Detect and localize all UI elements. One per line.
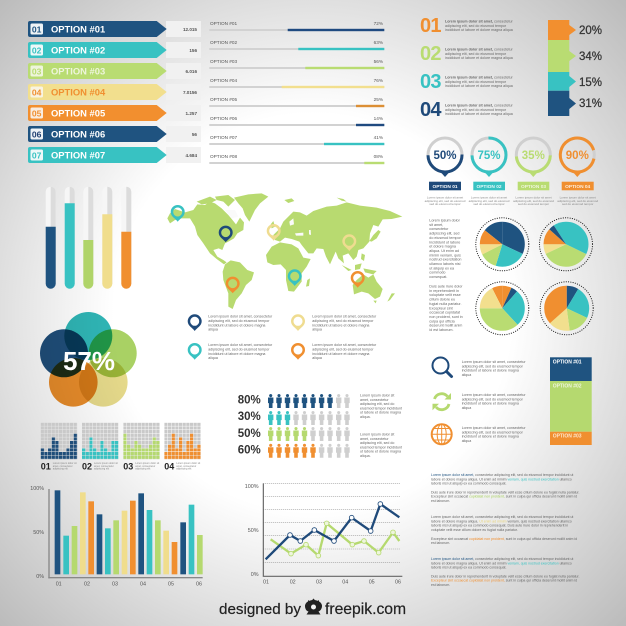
map legend: Lorem ipsum dolor sit amet, consectetur <box>312 314 377 318</box>
panel: ring gauges <box>425 134 598 206</box>
panel: numbered list: 03 <box>420 71 441 93</box>
text block: beside pie charts: id est laborum. <box>429 328 453 332</box>
text block: paragraphs: est laborum. <box>431 499 450 503</box>
people pictogram chart: 30% <box>238 411 261 423</box>
text block: beside pie charts: ullamco laboris nisi <box>429 262 461 266</box>
pie chart 3 <box>476 282 529 335</box>
ribbon: option 02 <box>28 42 197 58</box>
footer: designed by freepik: designed by <box>219 601 301 618</box>
bar chart: 100% <box>30 486 44 492</box>
waffle chart 03: Lorem ipsum dolor sit <box>135 462 160 465</box>
text block: beside pie charts <box>429 218 463 332</box>
map legend: Lorem ipsum dolor sit amet, consectetur <box>208 314 273 318</box>
text block: paragraphs: cupidatat non proident, sunt in culpa qui officia deserunt mollit anim id <box>469 537 577 541</box>
panel: numbered list: 02 <box>420 43 441 65</box>
text block: beside pie charts: in reprehenderit in <box>429 289 459 293</box>
bar chart: 05 <box>168 582 174 588</box>
bar chart: 02 <box>84 582 90 588</box>
text block: paragraphs: sunt in culpa qui officia deserunt mollit anim id <box>506 579 577 583</box>
bar chart <box>30 486 203 588</box>
gauge: 75%: Lorem ipsum dolor sit amet <box>471 196 507 200</box>
text block: paragraphs: Duis aute irure dolor in reprehenderit in voluptate velit esse cillum dolore eu fugiat nulla pariatur. <box>431 490 579 494</box>
panel: progress bars: 25% <box>374 97 383 102</box>
gauge: 90%: Lorem ipsum dolor sit amet <box>560 196 596 200</box>
panel: progress bars: OPTION #01 <box>210 21 237 26</box>
waffle chart 02: amet, consectetur <box>94 465 114 468</box>
text: refresh description: Lorem ipsum dolor sit amet, consectetur <box>462 393 526 397</box>
ribbon: option 02: OPTION #02 <box>51 45 105 56</box>
text: refresh description: aliqua <box>462 406 471 410</box>
stacked option column: OPTION #03 <box>553 434 582 440</box>
gauge: 35%: sed do eiusmod tempor <box>518 202 549 206</box>
pie chart 4 <box>540 282 593 335</box>
text block: paragraphs <box>431 473 579 587</box>
stacked percent bar <box>548 20 602 116</box>
waffle chart 01: amet, consectetur <box>53 465 73 468</box>
text block: paragraphs: consectetur adipiscing elit, sed do eiusmod tempor incididunt ut <box>475 557 573 561</box>
waffle chart 03 <box>123 423 160 471</box>
text block: paragraphs: est laborum. <box>431 541 450 545</box>
text block: paragraphs: laboris nisi ut aliquip ex ea commodo consequat. <box>431 566 507 570</box>
text: magnifier description: incididunt ut labore et dolore magna <box>462 369 519 373</box>
icon: magnifier <box>432 358 452 376</box>
text block: beside pie charts: deserunt mollit anim <box>429 324 462 328</box>
text: globe description: aliqua <box>462 439 471 443</box>
waffle chart 02: Lorem ipsum dolor sit <box>94 462 118 465</box>
icon: globe <box>432 424 452 444</box>
ribbon: option 02: 156 <box>189 48 197 53</box>
panel: numbered list: incididunt ut labore et dolore magna aliqua <box>445 28 513 32</box>
text block: beside pictogram: eiusmod tempor incididunt <box>360 445 402 449</box>
waffle chart 03: amet, consectetur <box>135 465 155 468</box>
ribbon: option 01: 01 <box>32 25 42 35</box>
map legend: adipiscing elit, sed do eiusmod tempor <box>312 347 374 351</box>
text block: beside pie charts: occaecat cupidatat <box>429 311 460 315</box>
ribbon: option 06: OPTION #06 <box>51 129 105 140</box>
bar chart: 0% <box>36 574 44 580</box>
panel: progress bars: OPTION #04 <box>210 78 237 83</box>
panel: option ribbons <box>28 21 201 163</box>
gauge: 75%: sed do eiusmod tempor <box>473 202 505 206</box>
line chart: 02 <box>290 580 296 586</box>
panel: numbered list: Lorem ipsum dolor sit amet, <box>445 76 493 80</box>
text block: beside pie charts: adipiscing elit, sed <box>429 232 459 236</box>
icon: freepik logo <box>305 598 322 614</box>
line chart: 50% <box>248 528 259 534</box>
gauge: 35%: 35% <box>522 150 545 162</box>
text block: beside pie charts: minim veniam, quis <box>429 253 461 257</box>
panel: numbered list: consectetur <box>494 76 513 80</box>
ribbon: option 04: 7.0156 <box>183 90 197 95</box>
gauge: 75%: OPTION 02 <box>476 184 502 190</box>
stacked option column <box>550 357 592 445</box>
ribbon: option 01 <box>28 21 197 37</box>
text block: beside pie charts: Lorem ipsum dolor <box>429 218 461 222</box>
panel: numbered list: consectetur <box>494 48 513 52</box>
text block: beside pie charts: et dolore magna <box>429 245 457 249</box>
gauge: 35%: Lorem ipsum dolor sit amet <box>515 196 552 200</box>
line chart: 05 <box>369 580 375 586</box>
text: globe description: adipiscing elit, sed do eiusmod tempor <box>462 430 524 434</box>
map legend: aliqua <box>208 328 218 332</box>
text block: beside pie charts: nostrud exercitation <box>429 258 461 262</box>
icon: refresh arrows <box>432 393 451 410</box>
stacked percent bar: 34% <box>579 51 602 63</box>
ribbon: option 04 <box>28 84 197 100</box>
text block: beside pictogram: adipiscing elit, sed do <box>360 402 394 406</box>
gauge: 90%: OPTION 04 <box>565 184 591 190</box>
ribbon: option 07: OPTION #07 <box>51 150 105 161</box>
ribbon: option 04: 04 <box>32 88 42 98</box>
panel: numbered list: consectetur <box>494 20 513 24</box>
ribbon: option 03: OPTION #03 <box>51 66 105 77</box>
text block: beside pictogram: Lorem ipsum dolor sit <box>360 432 394 436</box>
panel: numbered list: consectetur <box>494 104 513 108</box>
footer: designed by freepik: freepik.com <box>325 601 406 618</box>
gauge: 35% <box>513 137 554 206</box>
gauge: 75%: 75% <box>477 150 501 162</box>
ribbon: option 06 <box>28 126 197 142</box>
waffle chart 02 <box>82 423 119 471</box>
map legend: aliqua <box>312 328 322 332</box>
line chart: 03 <box>316 580 322 586</box>
gauge: 50% <box>425 138 466 206</box>
text block: paragraphs: laboris nisi ut aliquip ex ea commodo consequat. Duis aute irure dolor in reprehenderit in <box>431 524 568 528</box>
ribbon: option 07 <box>28 147 197 163</box>
line chart <box>245 483 402 586</box>
text block: paragraphs: Lorem ipsum dolor sit amet, <box>431 557 474 561</box>
map legend: adipiscing elit, sed do eiusmod tempor <box>312 319 374 323</box>
stacked percent bar: 15% <box>579 77 602 89</box>
text block: beside pie charts: commodo <box>429 271 446 275</box>
text: refresh description: adipiscing elit, sed do eiusmod tempor <box>462 397 524 401</box>
ribbon: option 05 <box>28 105 197 121</box>
map legend: aliqua <box>208 356 218 360</box>
ribbon: option 03: 03 <box>32 67 42 77</box>
panel: numbered list: adipiscing elit, sed do eiusmod tempor <box>445 80 507 84</box>
text: magnifier description: Lorem ipsum dolor sit amet, consectetur <box>462 360 526 364</box>
text block: paragraphs: cupidatat non proident, sunt in culpa qui officia deserunt mollit anim id <box>469 495 577 499</box>
map legend: incididunt ut labore et dolore magna <box>312 352 369 356</box>
text block: paragraphs: Excepteur sint occaecat <box>431 537 469 541</box>
panel: numbered list: adipiscing elit, sed do eiusmod tempor <box>445 52 507 56</box>
gauge: 50%: Lorem ipsum dolor sit amet <box>427 196 463 200</box>
text block: beside pie charts: culpa qui officia <box>429 319 456 323</box>
text block: beside pie charts: voluptate velit esse <box>429 293 461 297</box>
ribbon: option 05: 05 <box>32 109 42 119</box>
panel: progress bars: 41% <box>374 135 383 140</box>
text: globe description: incididunt ut labore et dolore magna <box>462 435 519 439</box>
text block: paragraphs: est laborum. <box>431 583 450 587</box>
text block: beside pie charts: aliqua. Ut enim ad <box>429 249 459 253</box>
line chart: 01 <box>263 580 269 586</box>
text block: beside pie charts: cillum dolore eu <box>429 298 455 302</box>
people pictogram chart: 80% <box>238 395 261 407</box>
text block: beside pictogram: Lorem ipsum dolor sit <box>360 394 394 398</box>
waffle chart 01: 01 <box>41 461 51 471</box>
panel: progress bars: 14% <box>374 116 383 121</box>
text block: paragraphs: laboris nisi ut aliquip ex ea commodo consequat. <box>431 482 507 486</box>
venn diagram 57%: 57% <box>63 346 115 376</box>
panel: numbered list: 01 <box>420 15 441 37</box>
panel: numbered list <box>420 15 514 121</box>
text block: paragraphs: veniam, quis nostrud exercitation ullamco <box>507 561 572 565</box>
text block: beside pie charts: do eiusmod tempor <box>429 236 462 240</box>
ribbon: option 07: 4.684 <box>186 153 197 158</box>
text: refresh description: incididunt ut labore et dolore magna <box>462 402 519 406</box>
ribbon: option 01: OPTION #01 <box>51 24 105 35</box>
text block: paragraphs: labore et dolore magna aliqua. Ut enim ad minim <box>431 561 507 565</box>
people pictogram chart: 50% <box>238 428 261 440</box>
people pictogram chart <box>238 394 350 458</box>
text block: beside pie charts: non proident, sunt in <box>429 315 463 319</box>
panel: progress bars: OPTION #07 <box>210 135 237 140</box>
waffle chart 03: 03 <box>123 461 133 471</box>
panel: progress bars: OPTION #06 <box>210 116 237 121</box>
ribbon: option 01: 12.015 <box>183 27 197 32</box>
ribbon: option 03 <box>28 63 197 79</box>
map legend: adipiscing elit, sed do eiusmod tempor <box>208 347 270 351</box>
panel: numbered list: adipiscing elit, sed do eiusmod tempor <box>445 108 507 112</box>
bar chart: 03 <box>112 582 118 588</box>
text block: paragraphs: consectetur adipiscing elit, sed do eiusmod tempor incididunt ut <box>475 473 573 477</box>
bar chart: 04 <box>140 582 146 588</box>
text block: beside pictogram: aliqua. <box>360 415 371 419</box>
map legend: incididunt ut labore et dolore magna <box>208 352 265 356</box>
gauge: 90%: adipiscing elit, sed do eiusmod <box>557 199 598 203</box>
test tube bars <box>46 187 131 289</box>
text block: beside pie charts: incididunt ut labore <box>429 240 460 244</box>
panel: progress bars: OPTION #03 <box>210 59 237 64</box>
text block: beside pie charts: Excepteur sint <box>429 306 453 310</box>
map legend: Lorem ipsum dolor sit amet, consectetur <box>312 343 377 347</box>
map legend: incididunt ut labore et dolore magna <box>312 323 369 327</box>
text block: paragraphs: Excepteur sint occaecat <box>431 495 469 499</box>
text block: paragraphs: labore et dolore magna aliqua. Ut enim ad minim <box>431 477 507 481</box>
line chart: 06 <box>395 580 401 586</box>
gauge: 35%: adipiscing elit, sed do eiusmod <box>513 199 554 203</box>
text block: beside pictogram: amet, consectetur <box>360 398 389 402</box>
panel: progress bars: OPTION #05 <box>210 97 237 102</box>
text block: paragraphs: labore et dolore magna aliqua. <box>431 519 479 523</box>
text block: paragraphs: voluptate velit esse cillum dolore eu fugiat nulla pariatur. <box>431 528 518 532</box>
panel: progress bars: OPTION #08 <box>210 154 237 159</box>
text block: beside pictogram: ut labore et dolore magna <box>360 450 401 454</box>
panel: numbered list: adipiscing elit, sed do eiusmod tempor <box>445 24 507 28</box>
gauge: 90%: sed do eiusmod tempor <box>562 202 593 206</box>
panel: numbered list: Lorem ipsum dolor sit amet, <box>445 104 493 108</box>
text: globe description: Lorem ipsum dolor sit amet, consectetur <box>462 426 526 430</box>
gauge: 90%: 90% <box>566 150 589 162</box>
venn diagram 57% <box>40 312 137 407</box>
gauge: 90% <box>557 134 598 206</box>
waffle chart 01: Lorem ipsum dolor sit <box>53 462 77 465</box>
waffle chart 04: amet, consectetur <box>176 465 196 468</box>
panel: numbered list: incididunt ut labore et dolore magna aliqua <box>445 112 513 116</box>
text block: paragraphs: Excepteur sint occaecat cupidatat non proident, <box>431 579 505 583</box>
panel: progress bars: 08% <box>374 154 383 159</box>
line chart: 0% <box>251 572 259 578</box>
line chart: 04 <box>342 580 348 586</box>
text block: beside pie charts: sit amet, <box>429 223 443 227</box>
ribbon: option 07: 07 <box>32 151 42 161</box>
map pins <box>171 205 365 293</box>
map legend <box>188 314 377 360</box>
text block: beside pie charts: consectetur <box>429 227 449 231</box>
text block: paragraphs: Ut enim ad minim veniam, quis nostrud exercitation ullamco <box>479 519 572 523</box>
ribbon: option 06: 06 <box>32 130 42 140</box>
text: magnifier description: adipiscing elit, sed do eiusmod tempor <box>462 364 524 368</box>
people pictogram chart: 60% <box>238 445 261 457</box>
text block: beside pictogram: ut labore et dolore magna <box>360 411 401 415</box>
gauge: 50%: OPTION 01 <box>432 184 458 190</box>
text block: paragraphs: Lorem ipsum dolor sit amet, consectetur adipiscing elit, sed do eiusmod tempor incididunt ut <box>431 515 573 519</box>
waffle chart 04: adipiscing elit <box>176 468 192 471</box>
waffle chart 04: 04 <box>164 461 174 471</box>
panel: progress bars: 63% <box>374 40 383 45</box>
text block: beside pictogram <box>360 394 402 458</box>
panel: numbered list: incididunt ut labore et dolore magna aliqua <box>445 84 513 88</box>
stacked percent bar: 31% <box>579 98 602 110</box>
stacked option column: OPTION #02 <box>553 384 582 390</box>
bar chart: 01 <box>56 582 62 588</box>
map legend: aliqua <box>312 356 322 360</box>
panel: numbered list: 04 <box>420 99 442 121</box>
line chart: 100% <box>245 484 259 490</box>
panel: progress bars: OPTION #02 <box>210 40 237 45</box>
panel: progress bars: 72% <box>374 21 383 26</box>
gauge: 35%: OPTION 03 <box>521 184 546 190</box>
gauge: 75% <box>469 138 510 206</box>
panel: numbered list: Lorem ipsum dolor sit amet, <box>445 20 493 24</box>
bar chart: 50% <box>33 530 44 536</box>
ribbon: option 02: 02 <box>32 46 42 56</box>
text block: paragraphs: veniam, quis nostrud exercitation ullamco <box>507 477 572 481</box>
gauge: 50%: 50% <box>433 150 457 162</box>
waffle chart 04: Lorem ipsum dolor sit <box>176 462 201 465</box>
panel: progress bars: 56% <box>374 59 383 64</box>
text block: beside pie charts: ut aliquip ex ea <box>429 266 455 270</box>
text block: beside pie charts: Duis aute irure dolor <box>429 284 463 288</box>
panel: progress bars <box>209 21 384 164</box>
text block: beside pictogram: eiusmod tempor incididunt <box>360 406 402 410</box>
ribbon: option 03: 6.016 <box>186 69 197 74</box>
gauge: 75%: adipiscing elit, sed do eiusmod <box>469 199 510 203</box>
text: magnifier description: aliqua <box>462 373 471 377</box>
waffle chart 01 <box>41 423 77 471</box>
text block: paragraphs: Lorem ipsum dolor sit amet, <box>431 473 474 477</box>
waffle chart 01: adipiscing elit <box>53 468 68 471</box>
footer: designed by freepik <box>219 598 406 618</box>
world map <box>167 193 402 309</box>
ribbon: option 06: 56 <box>192 132 197 137</box>
map legend: adipiscing elit, sed do eiusmod tempor <box>208 319 270 323</box>
waffle chart 02: adipiscing elit <box>94 468 109 471</box>
text block: beside pie charts: fugiat nulla pariatur. <box>429 302 461 306</box>
panel: numbered list: Lorem ipsum dolor sit amet, <box>445 48 493 52</box>
waffle chart 04 <box>164 423 201 471</box>
ribbon: option 05: OPTION #05 <box>51 108 105 119</box>
waffle chart 02: 02 <box>82 461 92 471</box>
waffle chart 03: adipiscing elit <box>135 468 151 471</box>
panel: progress bars: 76% <box>374 78 383 83</box>
ribbon: option 05: 1.257 <box>186 111 197 116</box>
map legend: incididunt ut labore et dolore magna <box>208 323 265 327</box>
text block: beside pie charts: consequat. <box>429 275 447 279</box>
ribbon: option 04: OPTION #04 <box>51 87 106 98</box>
text block: beside pictogram: amet, consectetur <box>360 437 389 441</box>
pie chart 1 <box>476 218 529 271</box>
bar chart: 06 <box>196 582 202 588</box>
map legend: Lorem ipsum dolor sit amet, consectetur <box>208 343 273 347</box>
gauge: 50%: sed do eiusmod tempor <box>429 202 461 206</box>
stacked option column: OPTION #01 <box>553 360 582 366</box>
pie chart 2 <box>540 218 592 271</box>
text block: beside pictogram: adipiscing elit, sed do <box>360 441 394 445</box>
gauge: 50%: adipiscing elit, sed do eiusmod <box>425 199 466 203</box>
stacked percent bar: 20% <box>579 25 602 37</box>
text block: paragraphs: Duis aute irure dolor in reprehenderit in voluptate velit esse cillum dolore eu fugiat nulla pariatur. <box>431 574 579 578</box>
panel: numbered list: incididunt ut labore et dolore magna aliqua <box>445 56 513 60</box>
text block: beside pictogram: aliqua. <box>360 454 371 458</box>
